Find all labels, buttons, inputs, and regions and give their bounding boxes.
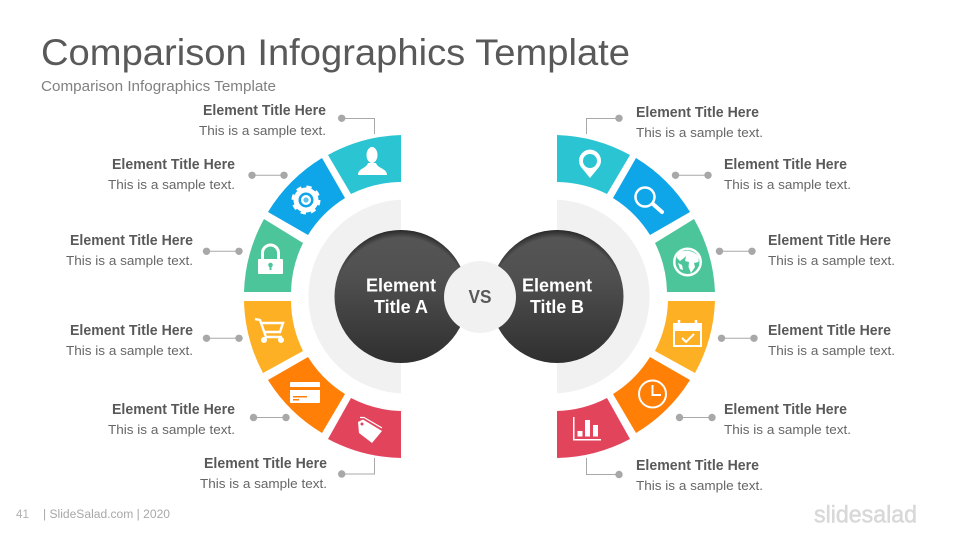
segment: left green with lock icon xyxy=(244,219,303,292)
VS badge: VS xyxy=(468,287,492,307)
footer source: | SlideSalad.com | 2020 xyxy=(43,509,170,521)
text block: right 3 xyxy=(768,233,895,268)
text block: left 1: Element Title Here xyxy=(203,103,326,119)
text block: left 2: Element Title Here xyxy=(112,157,235,173)
center circle: Element Title B: Element xyxy=(522,276,592,296)
text block: right 6: This is a sample text. xyxy=(636,478,763,493)
text block: left 3: Element Title Here xyxy=(70,233,193,249)
segment: left red with tag icon xyxy=(328,398,401,458)
icon: cart xyxy=(255,319,283,342)
segment: right green with globe icon xyxy=(655,219,715,292)
text block: left 3 xyxy=(66,233,193,268)
text block: left 5: Element Title Here xyxy=(112,402,235,418)
text block: left 5 xyxy=(108,402,235,437)
text block: right 2: This is a sample text. xyxy=(724,177,851,192)
text block: left 4 xyxy=(66,323,193,358)
text block: left 2 xyxy=(108,157,235,192)
segment: right blue with magnifier icon xyxy=(613,158,690,235)
icon: location pin xyxy=(579,150,601,178)
footer page number: 41 xyxy=(16,509,29,521)
center circle: Element Title B: Title B xyxy=(530,297,584,317)
segment: right red with bar chart icon xyxy=(557,398,630,458)
connector: left 6 xyxy=(338,458,374,478)
center circle: Element Title B xyxy=(490,230,624,363)
text block: right 5: This is a sample text. xyxy=(724,422,851,437)
icon: lock xyxy=(258,245,283,274)
segment: right yellow with calendar icon xyxy=(655,301,715,373)
text block: right 3: Element Title Here xyxy=(768,233,891,249)
connector: left 1 xyxy=(338,115,374,134)
connector: left 4 xyxy=(203,335,243,342)
connector: left 5 xyxy=(250,414,290,421)
text block: left 5: This is a sample text. xyxy=(108,422,235,437)
text block: right 4: This is a sample text. xyxy=(768,343,895,358)
text block: left 6: This is a sample text. xyxy=(200,476,327,491)
title: Comparison Infographics Template xyxy=(41,32,630,73)
segment: left yellow with cart icon xyxy=(244,301,303,373)
text block: left 1: This is a sample text. xyxy=(199,123,326,138)
text block: left 1 xyxy=(199,103,326,138)
segment: left blue with gear icon xyxy=(268,158,345,235)
text block: right 2: Element Title Here xyxy=(724,157,847,173)
center circle: Element Title A: Title A xyxy=(374,297,428,317)
text block: left 4: This is a sample text. xyxy=(66,343,193,358)
connector: right 3 xyxy=(716,248,756,255)
text block: left 3: This is a sample text. xyxy=(66,253,193,268)
text block: right 5 xyxy=(724,402,851,437)
subtitle: Comparison Infographics Template xyxy=(41,79,276,95)
VS badge xyxy=(444,261,516,333)
text block: left 6: Element Title Here xyxy=(204,456,327,472)
text block: left 6 xyxy=(200,456,327,491)
text block: left 2: This is a sample text. xyxy=(108,177,235,192)
connector: right 1 xyxy=(586,115,623,134)
icon: globe xyxy=(673,248,702,276)
center circle: Element Title A xyxy=(334,230,468,363)
icon: magnifier xyxy=(636,188,662,212)
text block: right 6 xyxy=(636,458,763,493)
grey half ring: left xyxy=(308,200,401,393)
text block: right 4: Element Title Here xyxy=(768,323,891,339)
text block: right 2 xyxy=(724,157,851,192)
connector: right 4 xyxy=(718,335,758,342)
text block: right 4 xyxy=(768,323,895,358)
icon: calendar xyxy=(674,320,701,346)
icon: credit card xyxy=(290,382,320,403)
grey half ring: right xyxy=(557,200,650,393)
segment: left orange with credit card icon xyxy=(268,357,345,433)
text block: right 3: This is a sample text. xyxy=(768,253,895,268)
text block: right 5: Element Title Here xyxy=(724,402,847,418)
text block: right 1: This is a sample text. xyxy=(636,125,763,140)
connector: left 2 xyxy=(248,172,288,179)
icon: gear xyxy=(294,188,318,212)
text block: right 1: Element Title Here xyxy=(636,105,759,121)
connector: left 3 xyxy=(203,248,243,255)
segment: right cyan with pin icon xyxy=(557,135,630,194)
icon: tag xyxy=(358,418,382,443)
center circle: Element Title A: Element xyxy=(366,276,436,296)
text block: right 6: Element Title Here xyxy=(636,458,759,474)
icon: user xyxy=(358,147,387,175)
segment: left cyan with user icon xyxy=(328,135,401,194)
connector: right 5 xyxy=(676,414,716,421)
connector: right 6 xyxy=(586,458,623,478)
logo wordmark: slidesalad xyxy=(814,502,917,528)
text block: right 1 xyxy=(636,105,763,140)
connector: right 2 xyxy=(672,172,712,179)
icon: clock xyxy=(639,380,666,408)
icon: bar chart xyxy=(573,417,601,440)
segment: right orange with clock icon xyxy=(613,357,690,433)
text block: left 4: Element Title Here xyxy=(70,323,193,339)
